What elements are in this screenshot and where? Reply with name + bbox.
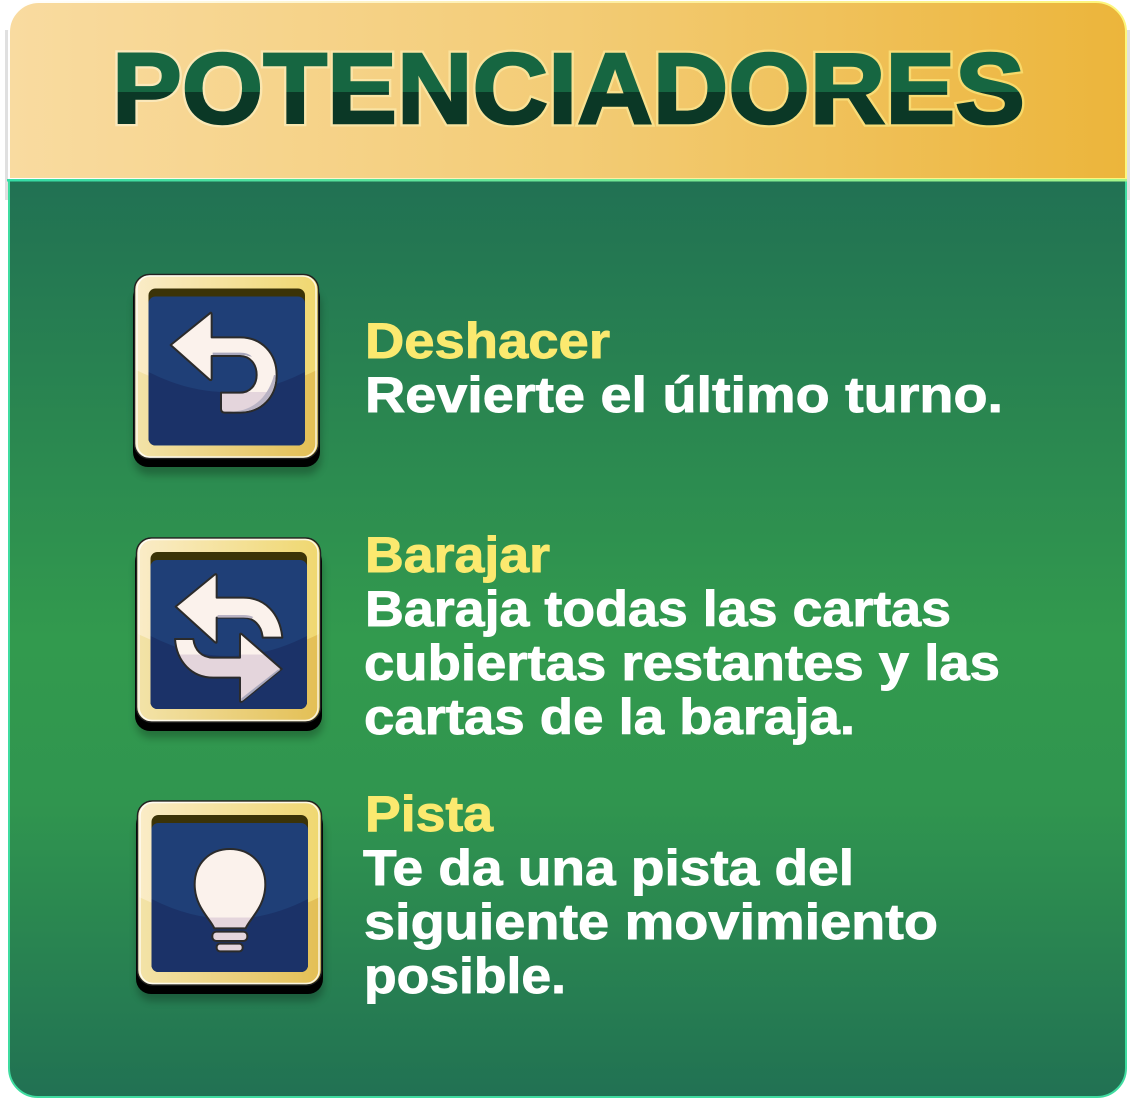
icon: undo button — [133, 274, 321, 475]
title: POTENCIADORES — [112, 33, 1025, 145]
text: Pista description: siguiente movimiento — [364, 894, 938, 950]
icon: hint button — [136, 801, 324, 1001]
panel: gold header — [7, 2, 1127, 182]
heading: Pista: Pista — [365, 786, 494, 842]
title: POTENCIADORES — [112, 33, 1025, 145]
heading: Deshacer: Deshacer — [365, 313, 610, 369]
text: Pista description: Te da una pista del — [363, 840, 854, 896]
icon: shuffle button — [135, 538, 323, 738]
text: Barajar description: cartas de la baraja. — [364, 689, 855, 745]
text: Deshacer description: Revierte el último turno. — [365, 367, 1003, 423]
text: Barajar description: Baraja todas las cartas — [365, 581, 951, 637]
text: Barajar description: cubiertas restantes y las — [364, 635, 1000, 691]
text: Pista description — [363, 840, 938, 1004]
text: Pista description: posible. — [364, 948, 566, 1004]
text: Barajar description — [364, 581, 1000, 745]
heading: Barajar: Barajar — [365, 527, 550, 583]
